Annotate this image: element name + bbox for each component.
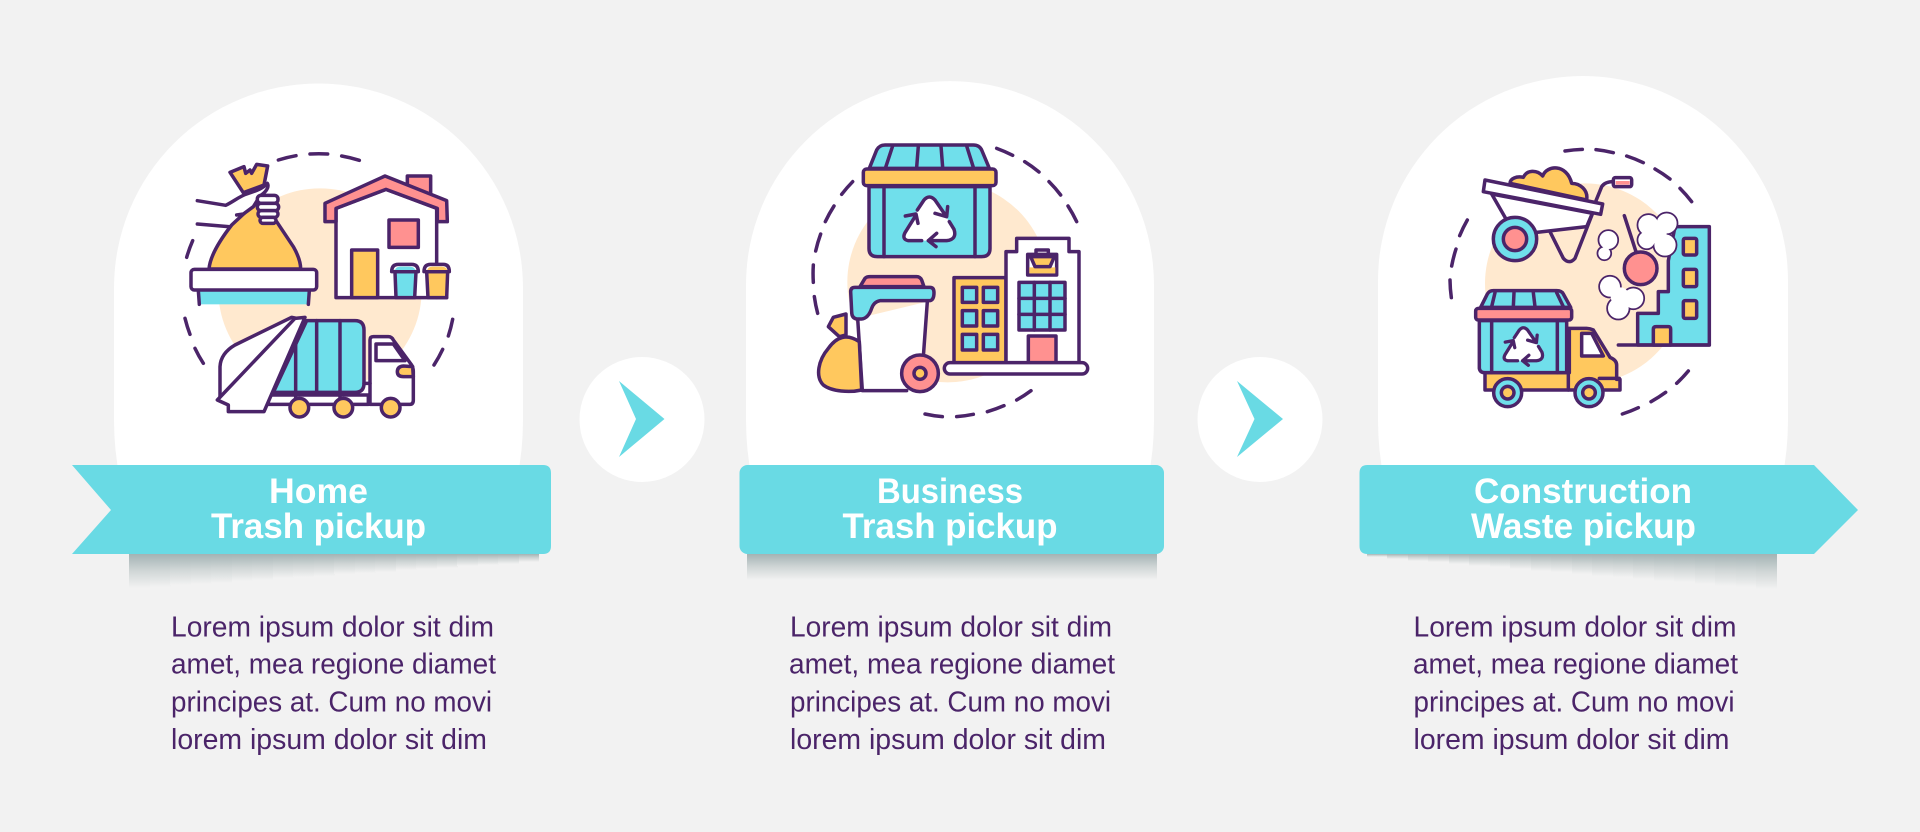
- text block: amet, mea regione diamet: [1413, 648, 1738, 680]
- arrow: step two to three: [1198, 357, 1322, 482]
- panel: business trash pickup: [740, 81, 1164, 756]
- arch card: [1378, 76, 1788, 480]
- heading: Home: [269, 472, 368, 511]
- ribbon banner: [72, 465, 551, 554]
- panel: construction waste pickup: [1360, 76, 1858, 756]
- text block: amet, mea regione diamet: [789, 648, 1115, 680]
- text block: lorem ipsum dolor sit dim: [1414, 724, 1730, 756]
- text block: [1413, 612, 1738, 756]
- ribbon banner: [1360, 465, 1858, 554]
- heading: Trash pickup: [211, 507, 426, 546]
- heading: Waste pickup: [1471, 507, 1696, 546]
- heading: [211, 472, 426, 546]
- heading: Business: [877, 472, 1023, 511]
- heading: Trash pickup: [842, 507, 1058, 546]
- shadow under banner: [1367, 554, 1777, 589]
- text block: principes at. Cum no movi: [1414, 686, 1734, 718]
- text block: principes at. Cum no movi: [790, 686, 1111, 718]
- heading: [842, 472, 1058, 546]
- shadow under banner: [129, 554, 539, 588]
- arch card: [746, 81, 1154, 480]
- text block: principes at. Cum no movi: [171, 686, 492, 718]
- banner: [740, 465, 1164, 554]
- text block: lorem ipsum dolor sit dim: [171, 724, 487, 756]
- shadow under banner: [747, 554, 1157, 580]
- text block: [789, 612, 1115, 756]
- text block: Lorem ipsum dolor sit dim: [171, 612, 494, 644]
- text block: amet, mea regione diamet: [171, 648, 496, 680]
- text block: lorem ipsum dolor sit dim: [790, 724, 1106, 756]
- icon: home trash and garbage truck: [185, 154, 453, 417]
- arrow: step one to two: [580, 357, 704, 482]
- heading: Construction: [1474, 472, 1692, 511]
- text block: [171, 612, 496, 756]
- icon: dumpster, bin and office buildings: [813, 145, 1088, 417]
- text block: Lorem ipsum dolor sit dim: [790, 612, 1112, 644]
- arch card: [114, 84, 523, 480]
- text block: Lorem ipsum dolor sit dim: [1414, 612, 1736, 644]
- heading: [1471, 472, 1696, 546]
- panel: home trash pickup: [72, 84, 551, 756]
- icon: wheelbarrow, wrecking ball and truck: [1450, 149, 1709, 414]
